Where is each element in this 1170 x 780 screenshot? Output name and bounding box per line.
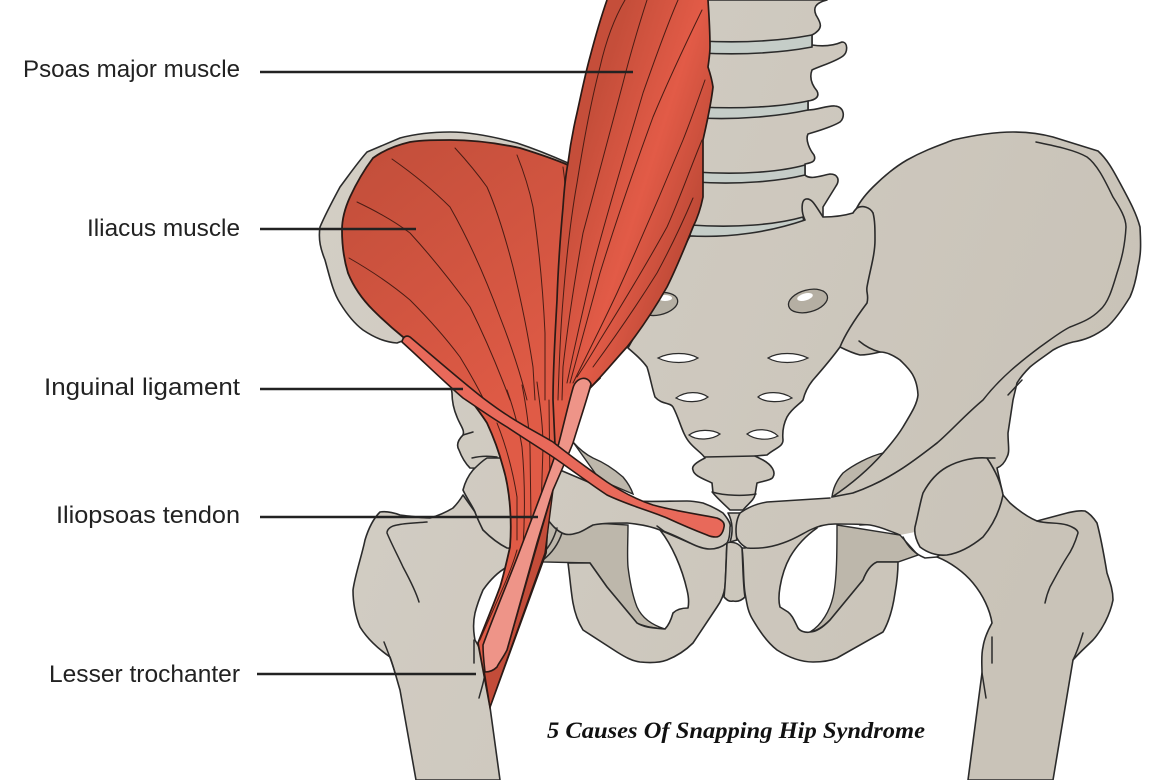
sacrum and coccyx <box>628 199 875 510</box>
right femur markings <box>903 458 1083 698</box>
left femur <box>353 458 540 780</box>
label: Psoas major muscle: Psoas major muscle <box>23 56 240 83</box>
right femoral head <box>915 458 1003 555</box>
right ilium <box>832 132 1141 525</box>
psoas major muscle <box>553 0 713 445</box>
psoas fibres <box>558 0 705 400</box>
lumbar spine <box>690 0 847 240</box>
left pubis and ischium <box>530 442 745 663</box>
superior pubic ramus right <box>735 443 937 548</box>
acetabulum arcs <box>543 533 562 560</box>
label: Iliacus muscle: Iliacus muscle <box>87 215 240 242</box>
left femoral head <box>463 458 530 550</box>
sacral foramina <box>636 285 830 439</box>
right femur <box>903 458 1113 780</box>
right ilium wing shading <box>832 453 883 497</box>
inguinal ligament <box>402 336 724 537</box>
label: Iliopsoas tendon: Iliopsoas tendon <box>56 502 240 529</box>
wing shading left <box>573 442 633 494</box>
label: Lesser trochanter: Lesser trochanter <box>49 661 240 688</box>
right pubis and ischium <box>735 443 937 662</box>
pubic symphysis <box>724 542 745 601</box>
label: Inguinal ligament: Inguinal ligament <box>44 374 240 401</box>
iliacus muscle <box>342 140 600 707</box>
superior pubic ramus left <box>530 470 730 549</box>
ilium inner rim <box>853 142 1126 493</box>
coccyx joints <box>705 456 755 457</box>
left femur markings <box>384 522 485 698</box>
left ilium <box>319 132 600 470</box>
lower muscle belly <box>484 490 553 707</box>
intervertebral discs <box>690 35 812 237</box>
obturator shading right <box>810 525 918 632</box>
title caption: 5 Causes Of Snapping Hip Syndrome <box>547 718 925 743</box>
obturator shading left <box>543 520 665 629</box>
iliopsoas tendon <box>483 378 591 672</box>
iliacus fibres <box>349 148 565 640</box>
